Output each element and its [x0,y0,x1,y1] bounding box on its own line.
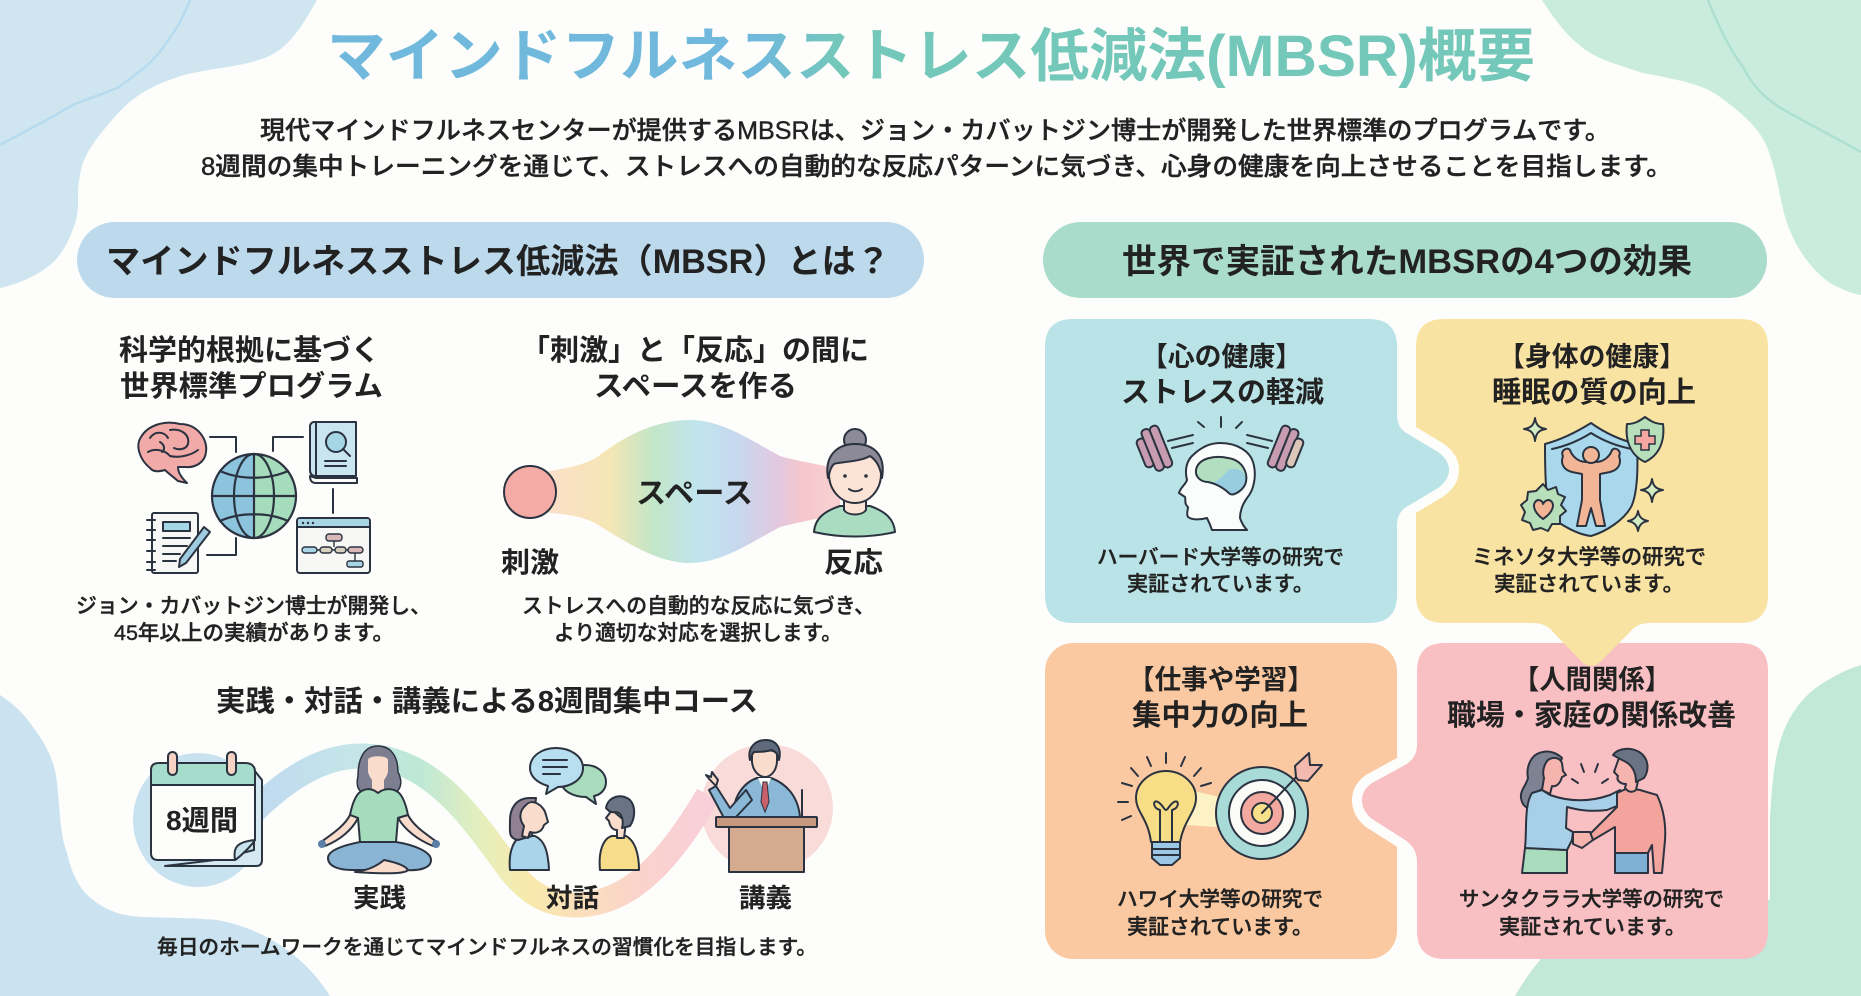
intro text: 現代マインドフルネスセンターが提供するMBSRは、ジョン・カバットジン博士が開発した世界標準のプログラムです。 [260,117,1610,145]
panel: relationships (pink card) [1362,643,1768,959]
card outline notch [1390,415,1449,525]
blue circle behind calendar [133,753,263,887]
icon: speech bubbles [530,748,606,804]
description: stimulus and response [522,595,875,645]
section heading: four effects [1043,222,1767,298]
label: space: スペース [636,478,753,510]
card content: relationships [1447,665,1736,939]
title: マインドフルネスストレス低減法(MBSR)概要 [327,24,1535,89]
icon: globe [212,454,296,538]
icon: shield and body [1521,417,1663,536]
icon: brain [138,423,206,483]
section heading: what is MBSR: マインドフルネスストレス低減法（MBSR）とは？ [106,243,890,281]
panel: scientific evidence [76,334,431,645]
intro text [201,117,1672,181]
card content: physical health [1472,342,1706,596]
heading: stimulus and response [521,334,869,403]
panel: mental health (blue card) [1045,319,1449,623]
background blob: bottom left [0,695,330,996]
card content: focus [1117,665,1323,939]
heading: physical health: 睡眠の質の向上 [1492,376,1696,409]
description: physical health [1472,546,1706,596]
icon: stimulus circle [504,466,556,518]
icon: calendar: 8週間 [166,805,238,836]
icon: notepad and pencil [147,513,210,573]
description: scientific evidence: ジョン・カバットジン博士が開発し、 [76,595,431,618]
icon: lecturer at podium [706,740,817,872]
card content: mental health [1097,342,1344,596]
description: relationships: 実証されています。 [1499,916,1686,939]
card background: relationships [1362,643,1768,959]
label: response: 反応 [824,547,883,578]
label: lecture: 講義 [739,883,792,913]
description: physical health: ミネソタ大学等の研究で [1472,546,1706,569]
icon: flow chart window [297,518,370,573]
icon: response person [814,429,895,536]
heading: mental health: 【心の健康】 [1141,342,1302,372]
connector lines [207,437,333,555]
icon: meditating woman [318,746,440,873]
card background: focus [1045,643,1397,959]
heading: relationships: 【人間関係】 [1513,665,1671,695]
card background: physical health [1416,319,1768,666]
heading: focus: 集中力の向上 [1132,699,1308,732]
icon: two people talking [510,796,639,870]
description: mental health: ハーバード大学等の研究で [1097,546,1344,569]
heading: focus [1128,665,1314,732]
heading: relationships: 職場・家庭の関係改善 [1447,699,1736,732]
background blob: top right [1542,0,1861,295]
heading: physical health [1492,342,1696,409]
icon: brain lifting weights [1133,417,1307,530]
icon: calendar [151,752,262,866]
section heading: what is MBSR [77,222,924,298]
description: stimulus and response: ストレスへの自動的な反応に気づき、 [522,595,875,618]
description: scientific evidence: 45年以上の実績があります。 [114,622,394,645]
heading: mental health: ストレスの軽減 [1121,376,1324,409]
background blob: bottom right [1515,665,1861,996]
pink circle behind lecturer [701,744,833,872]
description: homework: 毎日のホームワークを通じてマインドフルネスの習慣化を目指します。 [157,936,817,959]
panel: space between stimulus and response [501,334,895,645]
label: practice: 実践 [353,883,406,913]
icon: book [310,422,357,483]
description: mental health [1097,546,1344,596]
description: focus: ハワイ大学等の研究で [1117,888,1323,911]
description: physical health: 実証されています。 [1494,573,1684,596]
description: scientific evidence [76,595,431,645]
icon: light bulb and target [1118,753,1322,865]
icon: handshake [1521,749,1665,873]
heading: scientific evidence: 科学的根拠に基づく [119,334,380,367]
heading: physical health: 【身体の健康】 [1498,342,1686,372]
description: mental health: 実証されています。 [1127,573,1314,596]
heading: mental health [1121,342,1324,409]
panel: eight week course [133,685,833,959]
wave ribbon [250,756,708,905]
section heading: four effects: 世界で実証されたMBSRの4つの効果 [1122,243,1692,281]
intro text: 8週間の集中トレーニングを通じて、ストレスへの自動的な反応パターンに気づき、心身の健康を向上させることを目指します。 [201,153,1672,181]
description: focus [1117,888,1323,939]
heading: stimulus and response: スペースを作る [594,370,797,403]
description: relationships: サンタクララ大学等の研究で [1459,888,1724,911]
panel: physical health (yellow card) [1416,319,1768,666]
heading: scientific evidence: 世界標準プログラム [120,370,383,403]
card outline notch [1362,745,1430,862]
description: stimulus and response: より適切な対応を選択します。 [554,622,842,645]
heading: scientific evidence [119,334,383,403]
heading: stimulus and response: 「刺激」と「反応」の間に [521,334,869,367]
label: stimulus: 刺激 [501,547,559,578]
heading: focus: 【仕事や学習】 [1128,665,1314,695]
card background: mental health [1045,319,1449,623]
heading: eight week course: 実践・対話・講義による8週間集中コース [216,685,758,718]
description: relationships [1459,888,1724,939]
description: focus: 実証されています。 [1127,916,1313,939]
heading: relationships [1447,665,1736,732]
rainbow space shape [540,420,840,563]
label: dialogue: 対話 [546,883,599,913]
panel: focus (orange card) [1045,643,1397,959]
background blob: top left [0,0,317,288]
